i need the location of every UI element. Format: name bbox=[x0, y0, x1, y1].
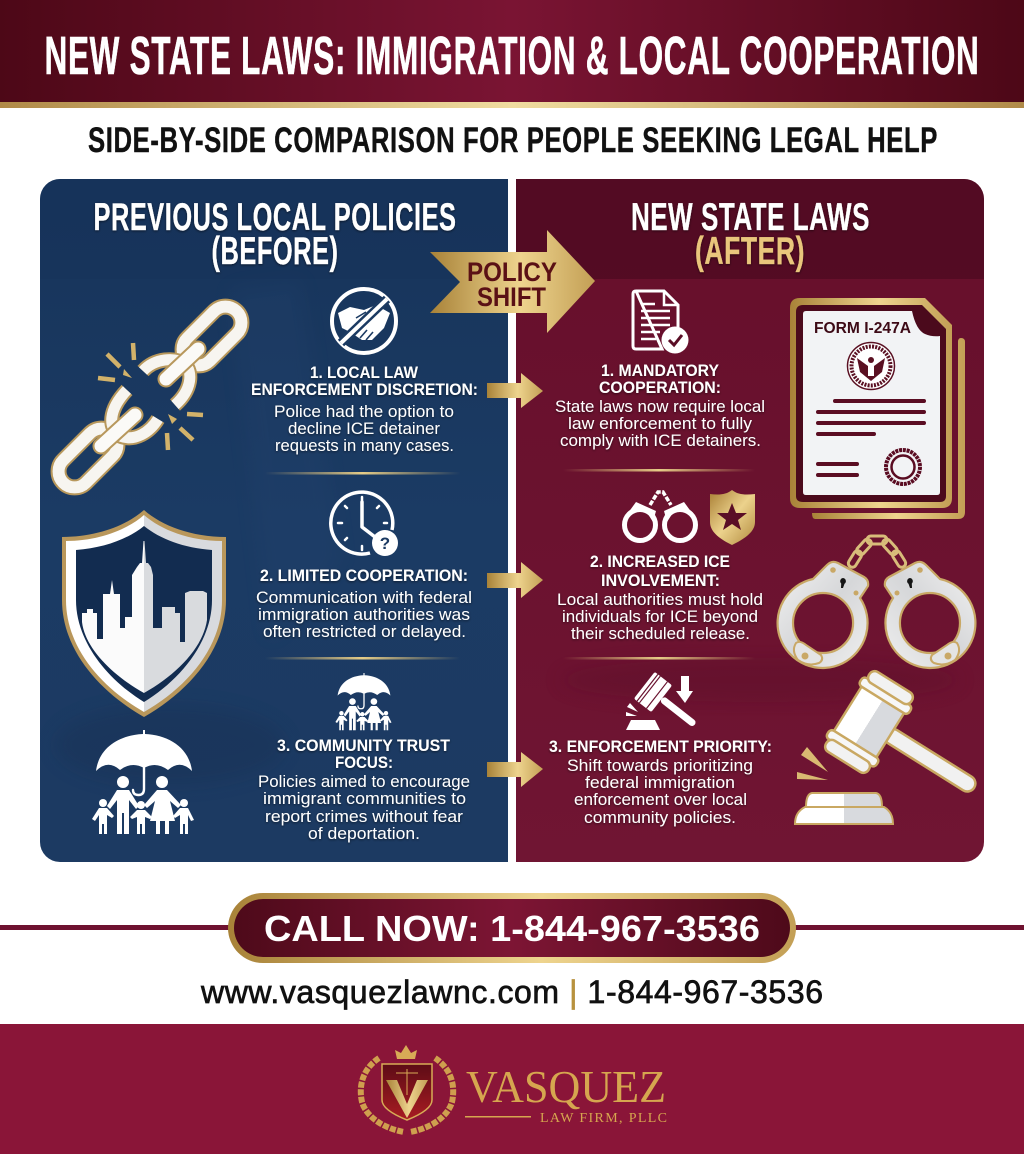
item 3 before: Policies aimed to encourage bbox=[258, 772, 470, 791]
item 2 after: their scheduled release. bbox=[571, 624, 750, 643]
item 3 before: report crimes without fear bbox=[265, 807, 463, 826]
form title: FORM I-247A bbox=[814, 320, 911, 337]
icon: clock with question mark: ? bbox=[380, 534, 390, 553]
item 2 after: 2. INCREASED ICE bbox=[590, 552, 730, 571]
heading: after: NEW STATE LAWS bbox=[631, 196, 870, 239]
form text lines bbox=[818, 401, 924, 475]
icon: large gavel bbox=[794, 670, 977, 825]
icon: clock with question mark bbox=[331, 492, 398, 556]
arrow: item 3 bbox=[487, 752, 543, 787]
icon: large handcuffs bbox=[778, 536, 975, 668]
icon: police badge bbox=[710, 490, 755, 545]
call to action bbox=[0, 893, 1024, 963]
item 1 after: State laws now require local bbox=[555, 397, 765, 416]
icon: small umbrella family bbox=[335, 673, 392, 730]
panel: previous local policies bbox=[40, 179, 508, 862]
item 3 after: Shift towards prioritizing bbox=[567, 756, 753, 775]
heading: after: (AFTER) bbox=[695, 230, 805, 273]
item 2 after: INVOLVEMENT: bbox=[601, 571, 720, 590]
logo crest bbox=[361, 1045, 453, 1132]
icon: small gavel with arrow bbox=[626, 672, 696, 730]
item 1 after: 1. MANDATORY bbox=[601, 361, 720, 380]
arrow: policy shift: SHIFT bbox=[477, 282, 546, 312]
item 3 before bbox=[258, 736, 470, 843]
arrow: policy shift bbox=[430, 230, 595, 333]
center divider bbox=[508, 179, 516, 862]
item 2 before: often restricted or delayed. bbox=[263, 622, 466, 641]
heading: after bbox=[631, 196, 870, 273]
panel: new state laws bbox=[516, 179, 999, 862]
item 2 before: Communication with federal bbox=[256, 588, 472, 607]
item 2 after bbox=[557, 552, 763, 643]
item 3 after bbox=[549, 737, 772, 827]
icon: document with check bbox=[633, 291, 688, 354]
item 1 before: ENFORCEMENT DISCRETION: bbox=[251, 380, 478, 399]
icon: no handshake bbox=[332, 289, 396, 353]
arrow: item 1 bbox=[487, 373, 543, 408]
header banner bbox=[0, 0, 1024, 108]
heading: before: PREVIOUS LOCAL POLICIES bbox=[94, 196, 456, 239]
arrow: item 2 bbox=[487, 562, 543, 598]
item 1 after: COOPERATION: bbox=[599, 378, 721, 397]
arrow: policy shift: POLICY bbox=[467, 257, 557, 287]
item 3 before: immigrant communities to bbox=[263, 789, 466, 808]
call to action: CALL NOW: 1-844-967-3536 bbox=[264, 908, 760, 949]
item 1 before: 1. LOCAL LAW bbox=[310, 363, 419, 382]
item 3 after: 3. ENFORCEMENT PRIORITY: bbox=[549, 737, 772, 756]
icon: shield with city skyline bbox=[62, 510, 226, 717]
item 2 after: individuals for ICE beyond bbox=[562, 607, 758, 626]
heading: before bbox=[94, 196, 456, 273]
icon: large umbrella family bbox=[92, 730, 194, 834]
item 1 after: law enforcement to fully bbox=[568, 414, 753, 433]
item 3 before: of deportation. bbox=[308, 824, 420, 843]
item 1 before bbox=[251, 363, 478, 455]
item 2 before: immigration authorities was bbox=[258, 605, 470, 624]
item 3 after: enforcement over local bbox=[574, 790, 747, 809]
item 3 after: federal immigration bbox=[585, 773, 735, 792]
logo wordmark: VASQUEZ bbox=[466, 1061, 666, 1112]
item 1 before: Police had the option to bbox=[274, 402, 454, 421]
item 3 after: community policies. bbox=[584, 808, 736, 827]
form stamp bbox=[886, 450, 920, 484]
website and phone: www.vasquezlawnc.com | 1-844-967-3536 bbox=[200, 974, 823, 1010]
item 2 before bbox=[256, 566, 472, 641]
item 1 after bbox=[555, 361, 765, 450]
item 1 after: comply with ICE detainers. bbox=[560, 431, 761, 450]
item 3 before: 3. COMMUNITY TRUST bbox=[277, 736, 451, 755]
item 2 after: Local authorities must hold bbox=[557, 590, 763, 609]
form seal bbox=[848, 342, 894, 390]
heading: before: (BEFORE) bbox=[212, 230, 338, 273]
logo tagline: LAW FIRM, PLLC bbox=[540, 1111, 667, 1126]
item 1 before: decline ICE detainer bbox=[288, 419, 440, 438]
item 2 before: 2. LIMITED COOPERATION: bbox=[260, 566, 468, 585]
item 3 before: FOCUS: bbox=[335, 753, 393, 772]
footer band bbox=[0, 1024, 1024, 1154]
icon: small handcuffs bbox=[624, 492, 696, 540]
item 1 before: requests in many cases. bbox=[275, 436, 454, 455]
icon: Form I-247A document bbox=[790, 298, 965, 519]
icon: broken chain bbox=[52, 300, 248, 494]
